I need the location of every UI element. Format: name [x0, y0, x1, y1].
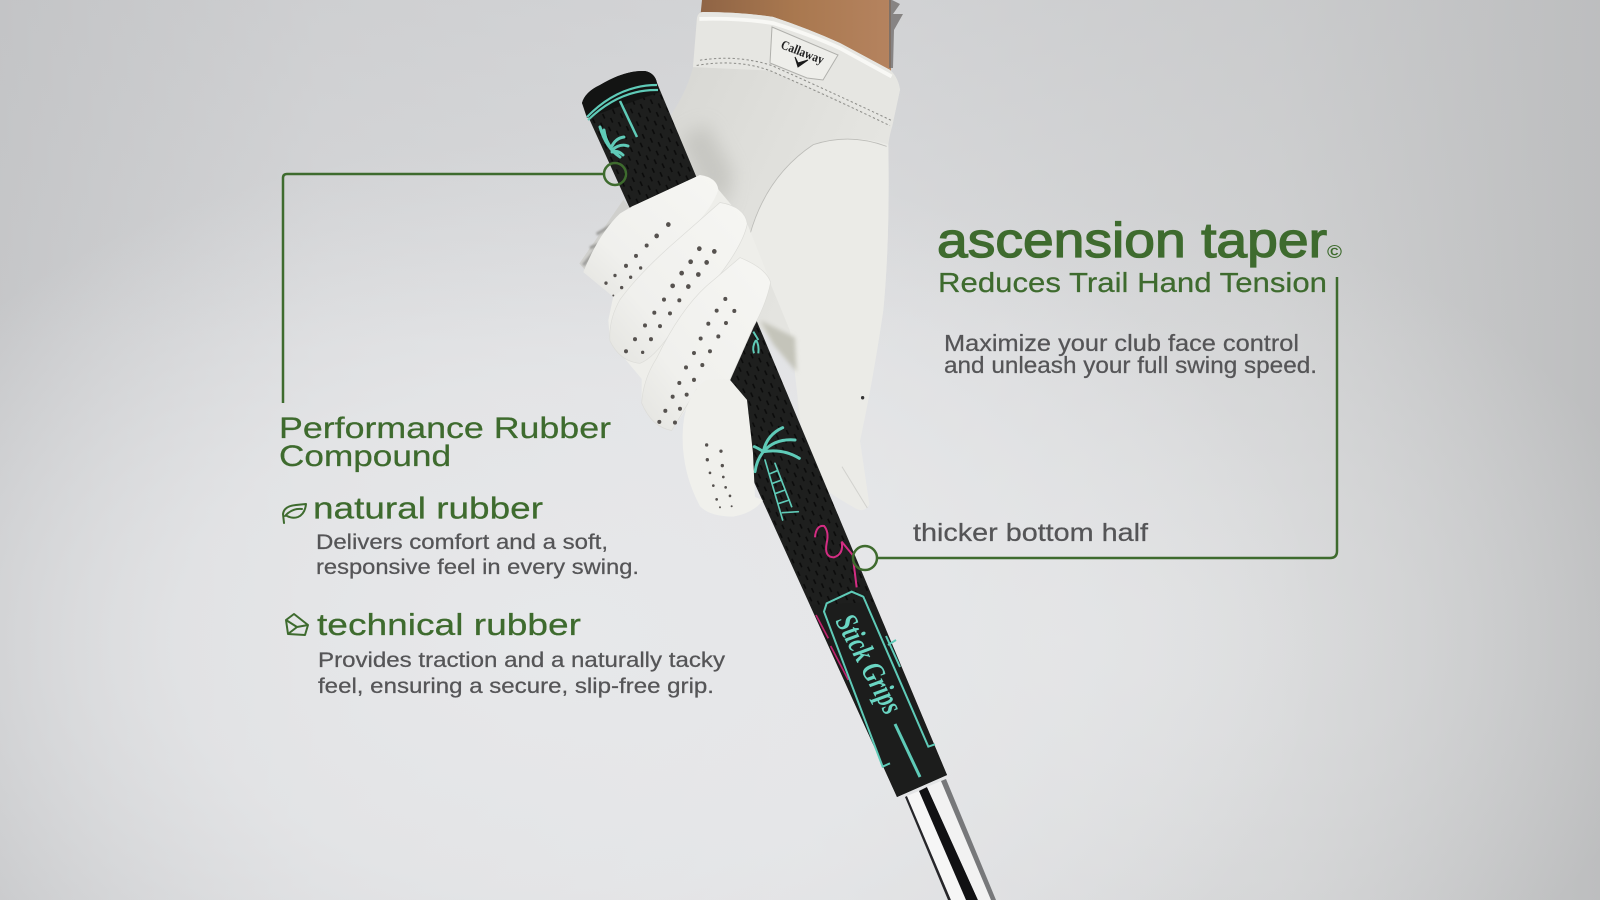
- thumb pad: [750, 139, 889, 510]
- middle palm tree with ladder: [754, 428, 799, 520]
- palm shadow: [760, 320, 797, 372]
- callout line: rubber compound: [283, 163, 626, 403]
- finger 1: [583, 175, 718, 297]
- grip: [582, 71, 947, 797]
- text: natural rubber description: [316, 531, 639, 579]
- text: technical rubber description: Provides traction and a naturally tacky: [318, 649, 726, 672]
- upper palm tree: [600, 127, 628, 157]
- text: ascension taper description: and unleash your full swing speed.: [944, 352, 1317, 378]
- palm seam: [750, 139, 887, 234]
- shaft: [905, 779, 996, 900]
- text: technical rubber description: feel, ensuring a secure, slip-free grip.: [318, 675, 714, 698]
- cuff seam: [699, 19, 892, 76]
- subheading: reduces trail hand tension: Reduces Trail Hand Tension: [938, 267, 1327, 298]
- text: ascension taper description: Maximize your club face control: [944, 330, 1299, 356]
- text: ascension taper description: [944, 330, 1317, 378]
- label: thicker bottom half: thicker bottom half: [913, 519, 1148, 547]
- fingers: [579, 175, 771, 517]
- wrinkled index base: [579, 200, 640, 276]
- heading: Performance Rubber Compound: Performance Rubber: [279, 412, 611, 445]
- finger 4: [683, 379, 763, 517]
- lower dash: [895, 724, 920, 777]
- subheading: technical rubber: technical rubber: [317, 607, 581, 642]
- teal end rings: [587, 85, 658, 120]
- thumb seam: [842, 467, 867, 508]
- label frame: [824, 592, 935, 767]
- glove palm and cuff: [668, 12, 900, 510]
- arm: [700, 0, 891, 72]
- flamingo: [815, 526, 857, 587]
- heading: Performance Rubber Compound: [279, 412, 611, 473]
- smooth grip end: [582, 71, 660, 118]
- lower flamingo: [816, 615, 848, 680]
- icon: rubber block: [286, 614, 308, 635]
- brand script: Stick Grips: [829, 608, 910, 720]
- text: natural rubber description: Delivers comfort and a soft,: [316, 531, 608, 554]
- perforations: [604, 222, 736, 508]
- grip body: [582, 71, 947, 797]
- cuff band: [693, 12, 900, 127]
- teal dash: [620, 101, 637, 137]
- heading: Performance Rubber Compound: Compound: [279, 440, 451, 473]
- finger 3: [642, 258, 771, 431]
- icon: leaf: [283, 504, 306, 523]
- heading: ascension taper: ascension taper: [937, 214, 1327, 268]
- finger 2: [610, 203, 747, 363]
- subheading: natural rubber: natural rubber: [313, 490, 543, 526]
- arm hair: [889, 0, 903, 68]
- callout line: thicker bottom half: [853, 277, 1337, 570]
- thumb perforation: [861, 396, 864, 400]
- heading: ascension taper: ©: [1327, 242, 1342, 262]
- text: technical rubber description: [318, 649, 726, 698]
- palm peeking above pinky: [753, 332, 759, 353]
- smooth lower section: [810, 602, 947, 797]
- logo tab: [770, 27, 838, 80]
- finger backing: [597, 175, 771, 431]
- cuff stitching: [697, 58, 892, 126]
- logo: Callaway: Callaway: [779, 37, 827, 67]
- upper palm shading: [680, 124, 733, 207]
- text: natural rubber description: responsive feel in every swing.: [316, 556, 639, 579]
- lower right palm: [886, 636, 900, 667]
